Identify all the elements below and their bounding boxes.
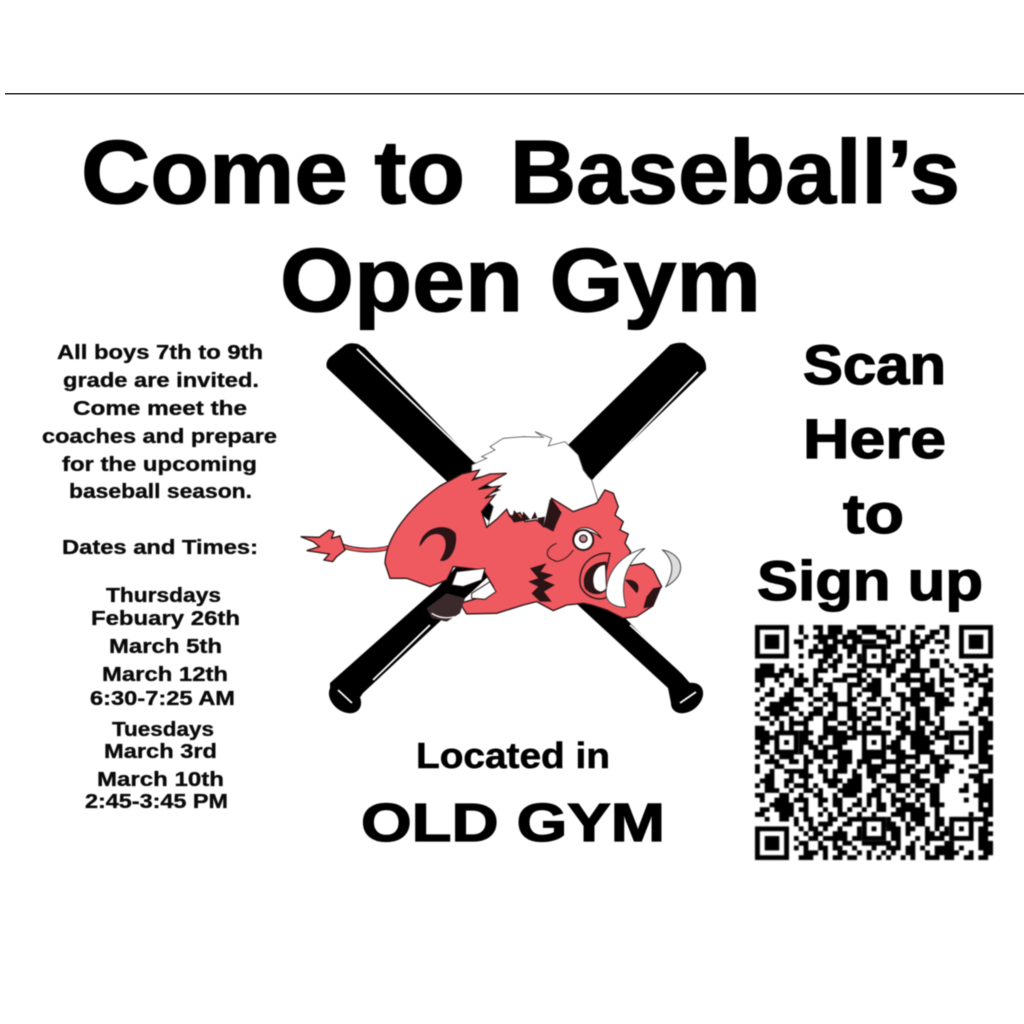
boar belly fur — [528, 563, 555, 602]
text block: dates and times: March 5th — [109, 636, 222, 658]
scan prompt: Here — [803, 407, 946, 470]
boar tusks — [606, 548, 681, 607]
boar snout shading — [625, 580, 662, 608]
QR right-hand modules — [935, 627, 993, 858]
text block: dates and times: Tuesdays — [112, 719, 214, 741]
QR code — [755, 625, 993, 860]
text block: dates and times: Thursdays — [106, 585, 221, 607]
scan prompt — [757, 333, 983, 612]
text block: dates and times: 2:45-3:45 PM — [85, 791, 228, 813]
text block: dates and times: March 10th — [97, 769, 224, 791]
boar mane fringe — [507, 510, 545, 527]
boar neck fold — [547, 543, 573, 561]
text block: dates and times: Dates and Times: — [62, 537, 258, 559]
text block: invitation details: Come meet the — [73, 398, 247, 420]
text block: dates and times: March 3rd — [104, 741, 217, 763]
boar mouth — [580, 553, 610, 599]
QR finder patterns — [755, 625, 993, 860]
text block: invitation details: grade are invited. — [63, 370, 259, 392]
text block: dates and times: Febuary 26th — [91, 608, 240, 630]
title: Open Gym — [280, 231, 761, 331]
bat: top-left to bottom-right — [326, 343, 709, 720]
text block: invitation details: baseball season. — [69, 481, 252, 503]
boar body — [385, 470, 662, 618]
boar tail — [301, 530, 390, 562]
title — [81, 123, 960, 331]
QR alignment patterns — [774, 644, 974, 841]
crossed bats and boar mascot — [301, 343, 709, 720]
text block: dates and times: March 12th — [102, 664, 228, 686]
text block: invitation details: for the upcoming — [62, 454, 257, 476]
boar mane — [472, 432, 598, 530]
boar eye — [573, 528, 602, 550]
location: Located in — [416, 735, 610, 776]
text block: invitation details: coaches and prepare — [42, 426, 277, 448]
scan prompt: Scan — [803, 333, 946, 396]
text block: dates and times: 6:30-7:25 AM — [90, 688, 235, 710]
boar ear shadow — [544, 498, 562, 532]
title: Baseball’s — [510, 123, 960, 223]
scan prompt: Sign up — [757, 549, 983, 612]
text block: dates and times — [62, 537, 258, 813]
bat: top-right to bottom-left — [323, 343, 706, 720]
title: Come to — [81, 123, 465, 223]
boar mascot — [301, 432, 681, 622]
text block: invitation details — [42, 342, 277, 503]
location: OLD GYM — [361, 793, 665, 853]
boar haunch swirl — [419, 527, 456, 561]
text block: invitation details: All boys 7th to 9th — [57, 342, 263, 364]
boar hooves — [427, 568, 496, 622]
location — [361, 735, 665, 853]
scan prompt: to — [843, 482, 904, 545]
